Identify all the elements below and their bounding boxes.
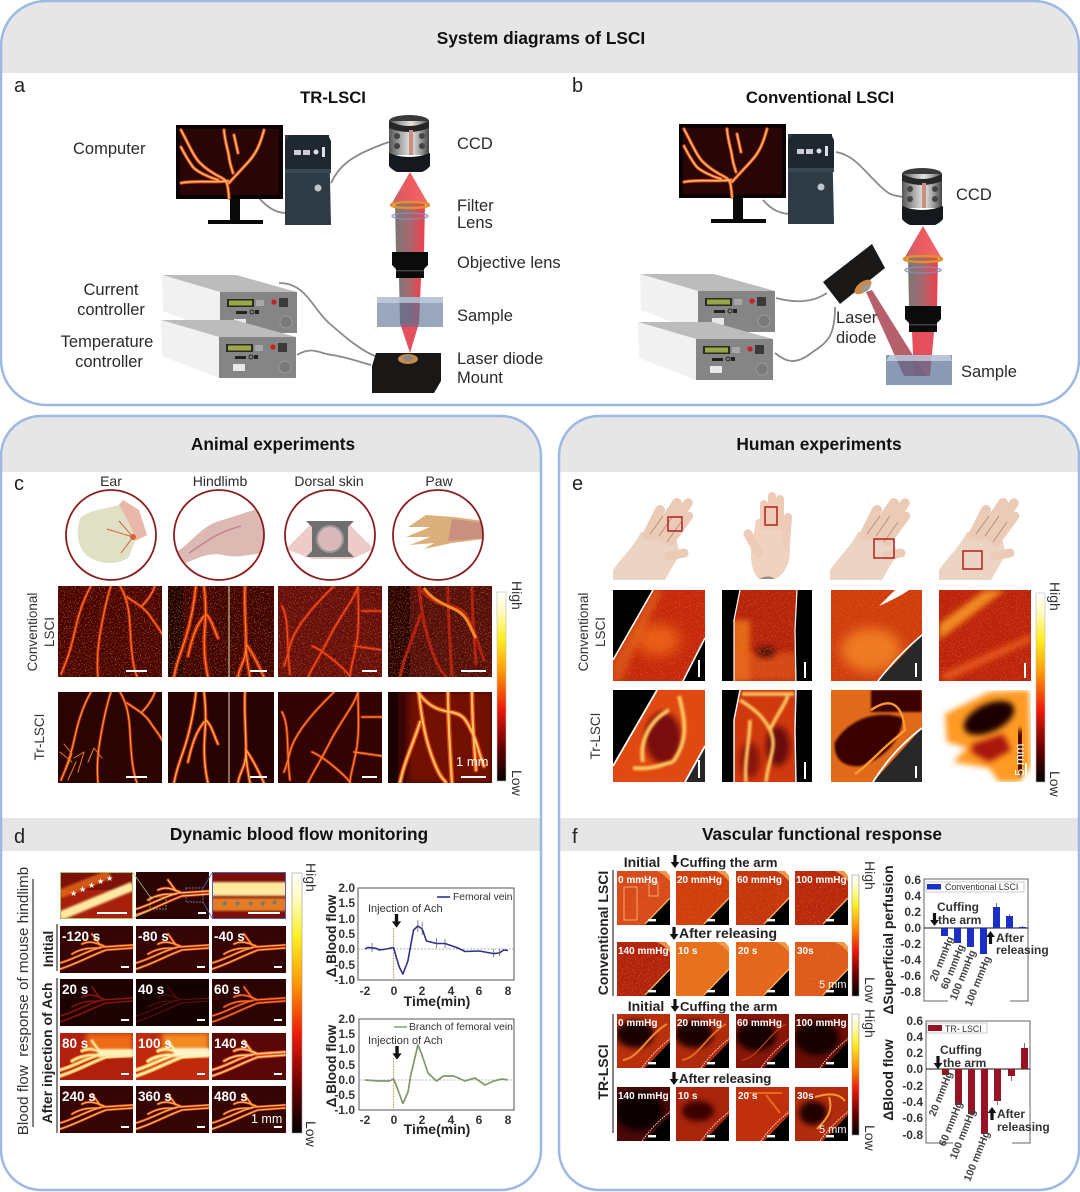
20 mmHg: 20 mmHg bbox=[677, 875, 722, 886]
row label: after injection: After injection of Ach bbox=[39, 982, 55, 1124]
10 s: 10 s bbox=[678, 946, 698, 957]
chart: superficial perfusion bars: the arm bbox=[938, 913, 981, 927]
image: zoom inset right: ★ bbox=[221, 899, 228, 908]
annotations: Cuffing bbox=[937, 900, 979, 914]
photo: paw bbox=[393, 490, 484, 580]
tick labels: -0.8 bbox=[902, 1128, 923, 1142]
axes tick labels: 0.5 bbox=[338, 1058, 355, 1072]
bar labels: 20 mmHg bbox=[928, 935, 956, 983]
tick labels: 0.6 bbox=[906, 1014, 923, 1028]
60 mmHg bbox=[736, 871, 789, 925]
image: TR dorsal skin bbox=[278, 692, 382, 783]
separator lines bbox=[612, 870, 614, 1133]
chart: blood flow bars: TR- LSCI bbox=[945, 1024, 982, 1034]
tick labels: 0.0 bbox=[906, 1062, 923, 1076]
sample block bbox=[886, 355, 952, 385]
axes tick labels: -0.5 bbox=[334, 958, 355, 972]
colorbar c: Low bbox=[509, 770, 525, 797]
chart: femoral vein: 4 bbox=[448, 984, 455, 998]
chart: branch of femoral vein: 6 bbox=[476, 1113, 483, 1127]
axes tick labels: -1.0 bbox=[334, 973, 355, 987]
image: zoom inset right: ★ bbox=[271, 898, 278, 907]
bar labels: 60 mmHg bbox=[939, 943, 967, 991]
image: zoom inset left: ★ bbox=[97, 877, 104, 886]
tick labels: 0.2 bbox=[906, 1046, 923, 1060]
tick labels: -0.2 bbox=[900, 937, 921, 951]
colorbar e: High bbox=[1047, 582, 1063, 611]
icon: current controller bbox=[162, 275, 297, 333]
photo: hand 1 bbox=[613, 503, 689, 580]
row label: Tr-LSCI: Tr-LSCI bbox=[588, 713, 603, 759]
140 mmHg bbox=[615, 1087, 671, 1141]
chart: branch of femoral vein bbox=[324, 1012, 514, 1137]
subtitle: TR-LSCI: TR-LSCI bbox=[300, 88, 366, 107]
image: zoom inset left bbox=[60, 872, 133, 919]
row label: Tr-LSCI: Tr-LSCI bbox=[32, 714, 47, 760]
sub-headings: Initial bbox=[628, 998, 664, 1014]
image: TR hand 1 bbox=[613, 690, 705, 782]
20 mmHg bbox=[676, 871, 729, 925]
20 s bbox=[736, 942, 789, 996]
-40 s: -40 s bbox=[214, 929, 245, 944]
image: conventional hindlimb bbox=[168, 586, 274, 677]
diagram a labels: CCD bbox=[457, 135, 493, 153]
photo: hand 4 bbox=[939, 503, 1015, 580]
annotations: Cuffing bbox=[940, 1043, 982, 1057]
annotation: Injection of Ach bbox=[368, 1035, 443, 1047]
diagram a labels: Laser diode bbox=[457, 350, 543, 368]
chart: branch of femoral vein: -2 bbox=[360, 1113, 371, 1127]
row label: conventional LSCI: Conventional LSCI bbox=[595, 871, 611, 995]
-40 s bbox=[212, 926, 286, 973]
cables bbox=[763, 152, 902, 361]
sub-headings: After releasing bbox=[679, 925, 777, 941]
diagram a labels: Current bbox=[83, 281, 139, 299]
image: conventional paw bbox=[388, 586, 492, 677]
chart: branch of femoral vein: 2 bbox=[419, 1113, 426, 1127]
30 s: 5 mm bbox=[819, 979, 846, 991]
row label: TR-LSCI: TR-LSCI bbox=[595, 1044, 611, 1100]
tick labels bbox=[900, 873, 921, 999]
-120 s: -120 s bbox=[62, 929, 100, 944]
colorbar f lower bbox=[852, 1009, 878, 1152]
legend bbox=[437, 896, 450, 898]
axes tick labels: 2.0 bbox=[338, 881, 355, 895]
tick labels: -0.2 bbox=[902, 1079, 923, 1093]
30 s: 5 mm bbox=[819, 1124, 846, 1136]
axes tick labels: 1.5 bbox=[338, 1027, 355, 1041]
row label: conventional LSCI: Conventional bbox=[576, 593, 591, 671]
60 mmHg bbox=[736, 1014, 790, 1068]
row label: initial: Initial bbox=[40, 931, 56, 967]
legend bbox=[927, 1023, 987, 1033]
image: TR hindlimb bbox=[168, 692, 274, 783]
100 mmHg bbox=[795, 871, 848, 925]
axes tick labels: 1.0 bbox=[338, 1042, 355, 1056]
tick labels bbox=[902, 1014, 923, 1142]
icon: computer bbox=[176, 125, 331, 225]
80 s bbox=[60, 1033, 133, 1080]
chart: femoral vein: 6 bbox=[476, 984, 483, 998]
image: TR hand 2 bbox=[722, 690, 812, 782]
diagram a labels: controller bbox=[75, 353, 143, 371]
separator lines bbox=[33, 879, 57, 1133]
diagram b: conventional LSCI setup bbox=[638, 124, 952, 385]
icon: temperature controller bbox=[161, 320, 296, 378]
chart: femoral vein: Time(min) bbox=[404, 993, 470, 1009]
colorbar c: High bbox=[509, 581, 525, 610]
sub-headings: Cuffing the arm bbox=[680, 855, 777, 870]
100 s bbox=[136, 1033, 209, 1080]
panel label d: d bbox=[14, 826, 25, 848]
image: zoom inset right: ★ bbox=[247, 899, 254, 908]
colorbar d bbox=[292, 863, 319, 1148]
100 mmHg: 100 mmHg bbox=[796, 1018, 847, 1029]
axes tick labels: 1.0 bbox=[338, 912, 355, 926]
20 s bbox=[736, 1087, 790, 1141]
image: TR ear bbox=[58, 692, 162, 783]
diagram b labels: diode bbox=[836, 329, 876, 347]
row label: conventional LSCI: Conventional bbox=[25, 593, 40, 671]
colorbar f upper: High bbox=[862, 861, 878, 890]
icon: current controller bbox=[640, 274, 775, 332]
scale text: 1 mm bbox=[456, 754, 488, 769]
240 s: 240 s bbox=[62, 1089, 96, 1104]
image: zoom inset right: ★ bbox=[234, 899, 241, 908]
icon: computer bbox=[679, 124, 834, 224]
photo: ear bbox=[66, 490, 156, 580]
chart: blood flow bars bbox=[880, 1014, 1050, 1183]
60 mmHg: 60 mmHg bbox=[737, 875, 782, 886]
heading: animal experiments: Animal experiments bbox=[191, 434, 355, 454]
0 mmHg: 0 mmHg bbox=[618, 875, 657, 886]
colorbar c bbox=[497, 581, 525, 797]
tick labels: 0.4 bbox=[906, 1030, 923, 1044]
column labels: Paw bbox=[425, 473, 454, 489]
axes tick labels: 2.0 bbox=[338, 1012, 355, 1026]
0 mmHg: 0 mmHg bbox=[618, 1018, 657, 1029]
tick labels: -0.4 bbox=[900, 953, 921, 967]
image: zoom inset left: ★ bbox=[106, 874, 113, 883]
tick labels: 0.2 bbox=[904, 905, 921, 919]
bar labels: 100 mmHg bbox=[948, 948, 979, 1002]
chart: superficial perfusion bars: releasing bbox=[996, 943, 1049, 957]
480 s: 480 s bbox=[214, 1089, 248, 1104]
reflected beam bbox=[912, 332, 934, 376]
10 s bbox=[676, 1087, 730, 1141]
connectors bbox=[133, 873, 212, 918]
image grid: time series bbox=[60, 926, 286, 1133]
image: conventional hand 2 bbox=[722, 590, 812, 681]
20 mmHg bbox=[675, 1014, 730, 1068]
panel label f: f bbox=[572, 826, 578, 848]
chart: branch of femoral vein: Branch of femoral vein bbox=[409, 1022, 513, 1033]
image: zoom inset left: ★ bbox=[70, 889, 77, 898]
colorbar f lower: High bbox=[862, 1009, 878, 1038]
tick labels: -0.6 bbox=[900, 969, 921, 983]
chart: femoral vein: Femoral vein bbox=[453, 892, 513, 903]
photo: hand 3 bbox=[830, 503, 906, 580]
diagram a labels: Mount bbox=[457, 369, 503, 387]
colorbar f upper bbox=[852, 861, 878, 1004]
100 mmHg: 100 mmHg bbox=[796, 875, 847, 886]
140 mmHg: 140 mmHg bbox=[618, 946, 669, 957]
axes tick labels bbox=[334, 881, 355, 987]
heading: human experiments: Human experiments bbox=[736, 434, 902, 454]
10 s: 10 s bbox=[678, 1091, 698, 1102]
colorbar e: Low bbox=[1047, 771, 1063, 798]
image: zoom inset right bbox=[212, 872, 286, 919]
40 s bbox=[136, 979, 209, 1026]
chart: femoral vein: 2 bbox=[419, 984, 426, 998]
20 s bbox=[60, 979, 133, 1026]
axes tick labels: 0.0 bbox=[338, 1073, 355, 1087]
icon: temperature controller bbox=[638, 322, 773, 380]
axes tick labels: 0.5 bbox=[338, 927, 355, 941]
diagram a labels: Sample bbox=[457, 307, 513, 325]
diagram a labels: controller bbox=[77, 301, 145, 319]
row title: blood flow response: Blood flow response of mouse hindlimb bbox=[15, 867, 32, 1135]
axes tick labels bbox=[334, 1012, 355, 1117]
photo: hand 2 bbox=[748, 496, 790, 579]
panel label c: c bbox=[14, 473, 24, 495]
diagram b labels: Laser bbox=[836, 309, 878, 327]
column labels: Hindlimb bbox=[193, 473, 247, 489]
chart: blood flow bars: releasing bbox=[997, 1120, 1050, 1134]
sub-headings bbox=[624, 854, 777, 1086]
480 s bbox=[212, 1086, 286, 1133]
image: conventional hand 3 bbox=[831, 590, 922, 681]
30 s bbox=[795, 942, 848, 996]
image: conventional ear bbox=[58, 586, 162, 677]
20 mmHg: 20 mmHg bbox=[677, 1018, 722, 1029]
title: system diagrams: System diagrams of LSCI bbox=[437, 28, 645, 48]
chart: branch of femoral vein: 8 bbox=[505, 1113, 512, 1127]
annotation: Injection of Ach bbox=[368, 903, 443, 915]
chart: branch of femoral vein: Time(min) bbox=[404, 1121, 470, 1137]
image: overview bbox=[136, 872, 209, 919]
chart: blood flow bars: the arm bbox=[943, 1056, 986, 1070]
panel label e: e bbox=[572, 473, 583, 495]
chart: femoral vein bbox=[324, 881, 514, 1009]
20 s: 20 s bbox=[738, 1091, 758, 1102]
colorbar f upper: Low bbox=[862, 977, 878, 1004]
icon: CCD camera bbox=[902, 168, 943, 225]
bar labels bbox=[928, 935, 994, 1008]
photo: hindlimb bbox=[171, 490, 265, 580]
axes tick labels: -0.5 bbox=[334, 1088, 355, 1102]
optical path bbox=[391, 172, 429, 278]
chart: superficial perfusion bars: ΔSuperficial perfusion bbox=[880, 865, 896, 1015]
60 s bbox=[212, 979, 286, 1026]
colorbar d: Low bbox=[303, 1121, 319, 1148]
diagram a labels: Temperature bbox=[61, 333, 153, 351]
image: TR paw bbox=[388, 692, 492, 783]
diagram a labels bbox=[61, 135, 561, 387]
tick labels: -0.6 bbox=[902, 1111, 923, 1125]
bar labels: 20 mmHg bbox=[927, 1070, 955, 1118]
colorbar f lower: Low bbox=[862, 1125, 878, 1152]
bar labels: 100 mmHg bbox=[948, 1107, 979, 1161]
laser beam bbox=[866, 290, 926, 376]
panel: human experiments bbox=[559, 416, 1079, 1190]
20 s: 20 s bbox=[62, 982, 88, 997]
tick labels: 0.4 bbox=[904, 889, 921, 903]
axes tick labels: 0.0 bbox=[338, 942, 355, 956]
chart: branch of femoral vein: Δ Blood flow bbox=[324, 1024, 339, 1107]
30 s bbox=[795, 1087, 849, 1141]
tick labels: -0.4 bbox=[902, 1095, 923, 1109]
heading: dynamic blood flow monitoring: Dynamic blood flow monitoring bbox=[170, 824, 428, 844]
diagram a labels: Computer bbox=[73, 140, 146, 158]
sample block bbox=[377, 297, 443, 327]
legend bbox=[394, 1026, 407, 1028]
-80 s bbox=[136, 926, 209, 973]
chart: femoral vein: -2 bbox=[360, 984, 371, 998]
30 s: 30s bbox=[797, 946, 814, 957]
image: conventional hand 1 bbox=[613, 590, 705, 681]
row label: conventional LSCI: LSCI bbox=[42, 617, 57, 647]
360 s bbox=[136, 1086, 209, 1133]
chart: femoral vein: 0 bbox=[391, 984, 398, 998]
sub-headings: Cuffing the arm bbox=[680, 999, 777, 1014]
image: conventional dorsal skin bbox=[278, 586, 382, 677]
image grid: conventional LSCI bbox=[617, 871, 849, 996]
icon: laser diode mount bbox=[372, 353, 441, 393]
column labels: Ear bbox=[100, 473, 122, 489]
cables bbox=[259, 142, 389, 365]
icon: CCD camera bbox=[389, 115, 430, 172]
chart: blood flow bars: After bbox=[997, 1107, 1025, 1121]
diagram a labels: Filter bbox=[457, 197, 494, 215]
tick labels: 0.6 bbox=[904, 873, 921, 887]
diagram a: TR-LSCI setup bbox=[161, 115, 443, 393]
100 s: 100 s bbox=[138, 1036, 172, 1051]
image: zoom inset right: ★ bbox=[259, 899, 266, 908]
panel label b: b bbox=[572, 75, 583, 97]
140 s bbox=[212, 1033, 286, 1080]
image: TR hand 3 bbox=[831, 690, 922, 782]
chart: superficial perfusion bars: Conventional LSCI bbox=[945, 882, 1018, 892]
chart: blood flow bars: ΔBlood flow bbox=[880, 1039, 896, 1121]
image: zoom inset left: ★ bbox=[79, 885, 86, 894]
480 s: 1 mm bbox=[251, 1112, 282, 1126]
tick labels: 0.0 bbox=[904, 921, 921, 935]
panel label a: a bbox=[14, 75, 26, 97]
sub-headings: After releasing bbox=[679, 1071, 771, 1086]
image: zoom inset left: ★ bbox=[88, 881, 95, 890]
panel: system diagrams of LSCI bbox=[1, 1, 1079, 405]
60 mmHg: 60 mmHg bbox=[737, 1018, 782, 1029]
chart: superficial perfusion bars: After bbox=[996, 931, 1024, 945]
column labels bbox=[100, 473, 454, 489]
360 s: 360 s bbox=[138, 1089, 172, 1104]
bar labels: 100 mmHg bbox=[963, 954, 994, 1008]
bar labels: 100 mmHg bbox=[962, 1129, 993, 1183]
subtitle: Conventional LSCI: Conventional LSCI bbox=[746, 88, 894, 107]
diagram b labels: Sample bbox=[961, 363, 1017, 381]
chart: superficial perfusion bars bbox=[880, 865, 1049, 1015]
diagram b labels bbox=[836, 186, 1017, 381]
sub-headings: Initial bbox=[624, 854, 660, 870]
image: TR hand 4: 5 mm bbox=[1012, 744, 1027, 776]
image grid: TR-LSCI bbox=[615, 1014, 849, 1141]
diagram b labels: CCD bbox=[956, 186, 992, 204]
panel: animal experiments bbox=[1, 416, 541, 1190]
20 s: 20 s bbox=[738, 946, 758, 957]
icon: angled laser mount bbox=[823, 244, 885, 304]
image: TR hand 4 bbox=[940, 690, 1031, 782]
100 mmHg bbox=[795, 1014, 849, 1068]
chart: branch of femoral vein: 0 bbox=[391, 1113, 398, 1127]
-80 s: -80 s bbox=[138, 929, 169, 944]
140 mmHg: 140 mmHg bbox=[618, 1091, 669, 1102]
0 mmHg bbox=[617, 871, 670, 925]
chart: branch of femoral vein: 4 bbox=[448, 1113, 455, 1127]
heading: vascular functional response: Vascular functional response bbox=[702, 824, 942, 844]
axes tick labels: -1.0 bbox=[334, 1103, 355, 1117]
diagram a labels: Lens bbox=[457, 214, 493, 232]
tick labels: -0.8 bbox=[900, 985, 921, 999]
optical path bbox=[904, 226, 942, 332]
column labels: Dorsal skin bbox=[294, 473, 364, 489]
chart: femoral vein: Δ Blood flow bbox=[324, 894, 339, 977]
colorbar e bbox=[1036, 582, 1063, 798]
-120 s bbox=[60, 926, 133, 973]
140 mmHg bbox=[617, 942, 670, 996]
0 mmHg bbox=[617, 1014, 670, 1068]
photo: dorsal skin chamber bbox=[285, 490, 375, 580]
bar labels: 60 mmHg bbox=[937, 1100, 965, 1148]
140 s: 140 s bbox=[214, 1036, 248, 1051]
10 s bbox=[676, 942, 729, 996]
240 s bbox=[60, 1086, 133, 1133]
row label: conventional LSCI: LSCI bbox=[593, 617, 608, 647]
diagram a labels: Objective lens bbox=[457, 254, 561, 272]
40 s: 40 s bbox=[138, 982, 164, 997]
30 s: 30s bbox=[797, 1091, 814, 1102]
legend bbox=[926, 882, 1024, 892]
chart: femoral vein: 8 bbox=[505, 984, 512, 998]
colorbar d: High bbox=[303, 863, 319, 892]
bar labels bbox=[927, 1070, 993, 1183]
laser beam lower part bbox=[399, 278, 421, 353]
60 s: 60 s bbox=[214, 982, 240, 997]
axes tick labels: 1.5 bbox=[338, 896, 355, 910]
80 s: 80 s bbox=[62, 1036, 88, 1051]
image: conventional hand 4 bbox=[939, 590, 1031, 681]
